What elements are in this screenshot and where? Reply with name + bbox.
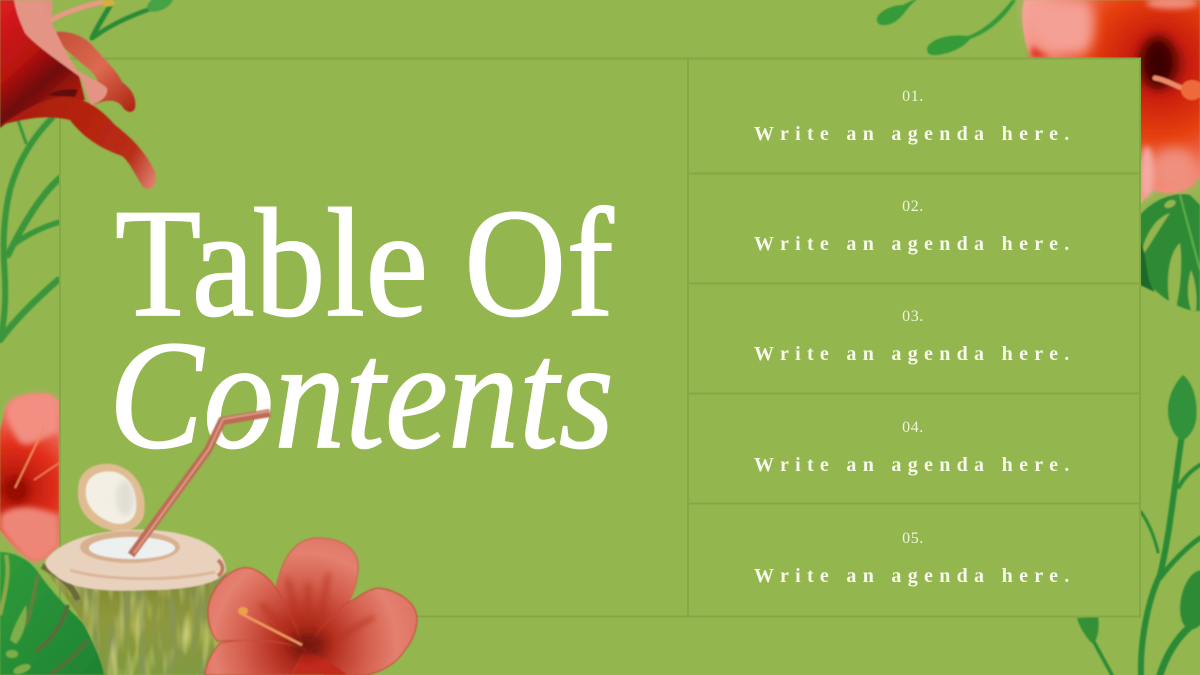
title (109, 178, 614, 482)
icon: top-right red hibiscus (1022, 0, 1200, 205)
coconut top (45, 530, 226, 591)
agenda item 4 (754, 419, 1076, 476)
straw (131, 411, 270, 555)
panel: frame and agenda grid (60, 58, 1140, 616)
coconut body (42, 566, 228, 675)
title: Contents (109, 310, 614, 482)
agenda item 2: Write an agenda here. (754, 233, 1076, 255)
agenda item 2 (754, 198, 1076, 255)
icon: top-left red lily (0, 0, 176, 189)
title: Table Of (115, 178, 614, 350)
agenda item 4: 04. (902, 419, 924, 436)
agenda item 2: 02. (902, 198, 924, 215)
icon: bottom red hibiscus (205, 538, 417, 675)
agenda item 3: 03. (902, 308, 924, 325)
icon: left vine (0, 118, 60, 340)
icon: right monstera leaf (1140, 194, 1200, 311)
agenda item 1: 01. (902, 88, 924, 105)
icon: right vine with buds (1077, 375, 1200, 675)
icon: left hibiscus (0, 393, 59, 561)
icon: bottom-left monstera leaf (0, 552, 108, 675)
coconut shell lid (78, 464, 145, 532)
agenda item 5 (754, 530, 1076, 587)
agenda item 1: Write an agenda here. (754, 123, 1076, 145)
agenda item 5: 05. (902, 530, 924, 547)
icon: top leaves (877, 0, 1016, 55)
agenda item 5: Write an agenda here. (754, 565, 1076, 587)
agenda item 1 (754, 88, 1076, 145)
agenda item 3 (754, 308, 1076, 365)
agenda item 3: Write an agenda here. (754, 343, 1076, 365)
icon: coconut drink (42, 411, 270, 675)
agenda item 4: Write an agenda here. (754, 454, 1076, 476)
